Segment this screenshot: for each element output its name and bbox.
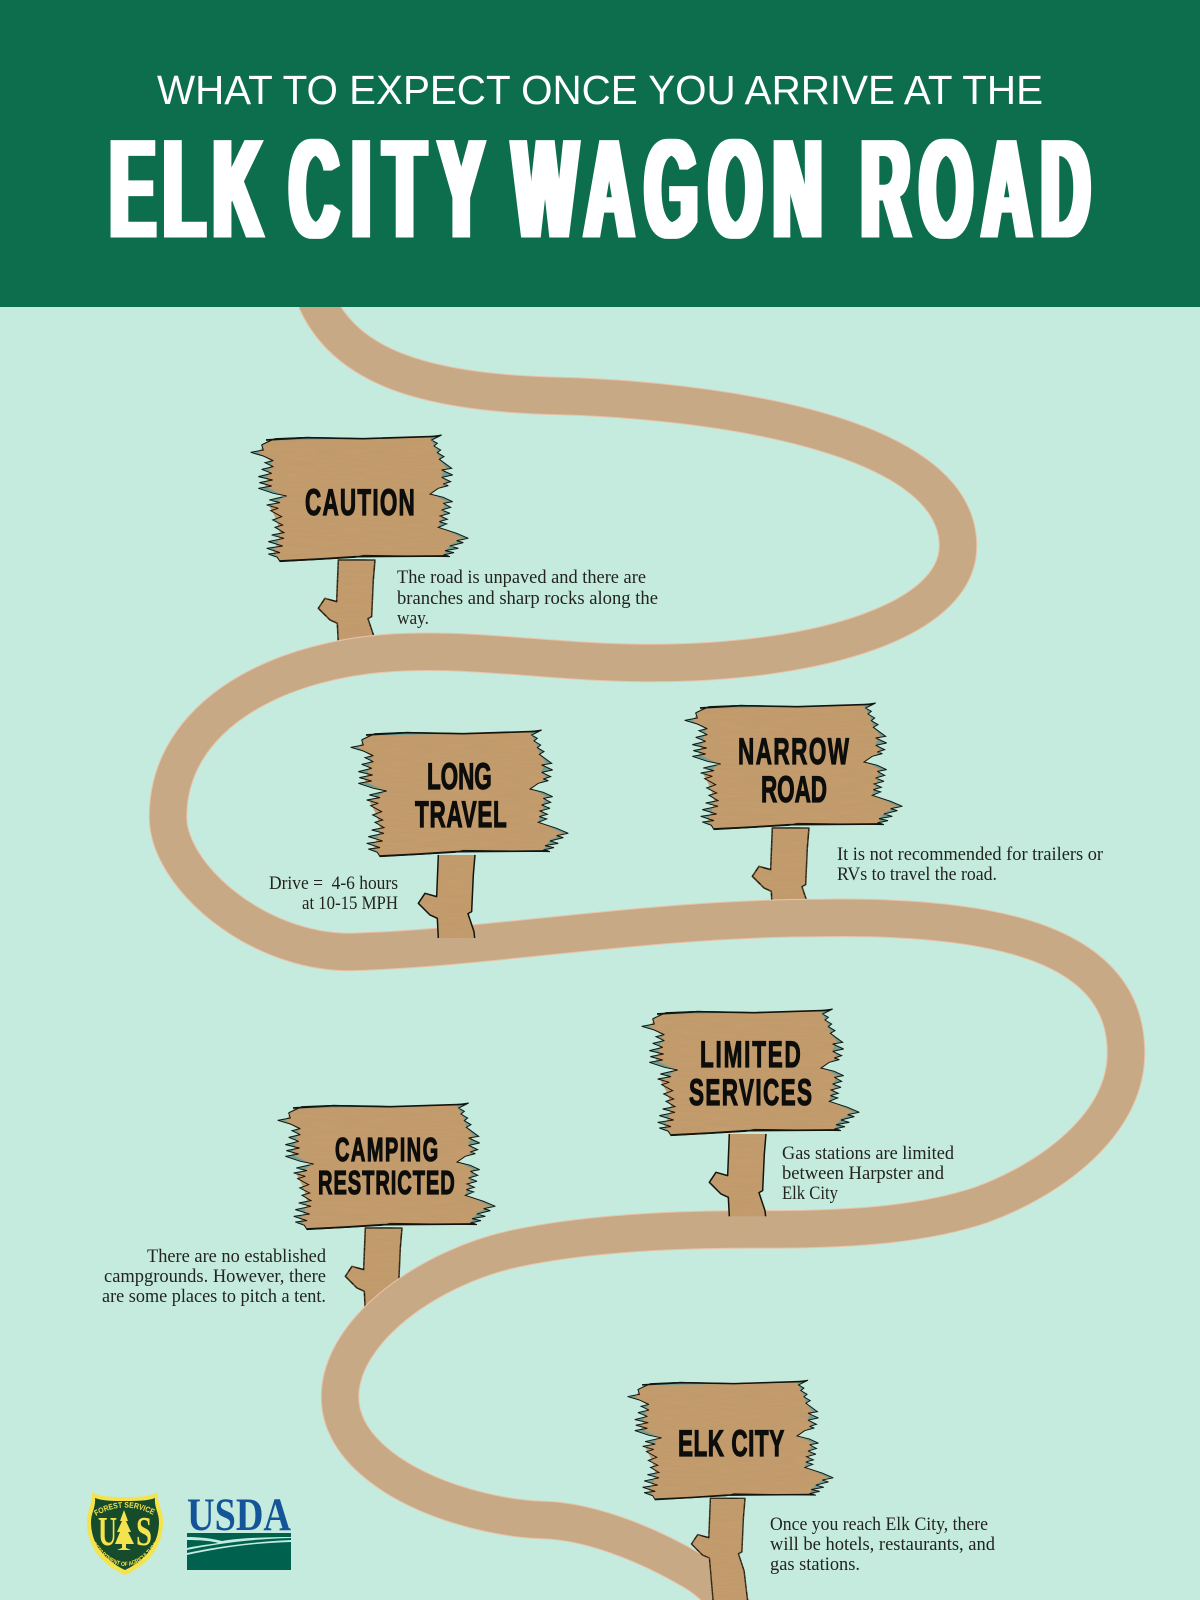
camping restricted post and board [278, 1103, 495, 1312]
header banner [0, 0, 1200, 307]
department of agriculture text: DEPARTMENT OF AGRICULTURE [95, 1542, 155, 1566]
text: camping restricted description: are some places to pitch a tent. [102, 1287, 326, 1307]
text: elk city description: gas stations. [770, 1555, 860, 1575]
long travel post and board [351, 730, 568, 938]
text: limited services description: between Harpster and [782, 1164, 945, 1184]
usda green field [187, 1533, 291, 1541]
sign: limited services [642, 1009, 859, 1216]
limited services label [689, 1033, 812, 1113]
winding road [168, 300, 1126, 1600]
letter S: S [136, 1508, 152, 1554]
camping restricted label: CAMPING [335, 1131, 438, 1168]
main title: ROAD [861, 110, 1090, 268]
limited services label: LIMITED [700, 1033, 801, 1075]
text: elk city description: Once you reach Elk City, there [770, 1515, 988, 1535]
long travel label [415, 755, 507, 835]
sign: elk city [628, 1380, 833, 1600]
sign: narrow road [685, 703, 902, 912]
logo: forest service shield [87, 1492, 163, 1575]
camping restricted label: RESTRICTED [318, 1164, 455, 1201]
limited services post and board [642, 1009, 859, 1216]
sign: long travel [351, 730, 568, 938]
pine tree [115, 1510, 134, 1550]
sign: camping restricted [278, 1103, 495, 1312]
text: elk city description: will be hotels, restaurants, and [770, 1535, 996, 1555]
long travel label: LONG [427, 755, 492, 797]
elk city post and board [628, 1380, 833, 1600]
text: caution description: branches and sharp rocks along the [397, 589, 658, 609]
narrow road label [738, 730, 850, 810]
main title: CITY [290, 110, 484, 268]
caution post and board [251, 435, 468, 644]
forest service text: FOREST SERVICE [94, 1502, 156, 1516]
usda wordmark: USDA [187, 1489, 291, 1541]
narrow road label: NARROW [738, 730, 850, 772]
main title: WAGON [513, 110, 822, 268]
text: camping restricted description: campgrounds. However, there [104, 1267, 326, 1287]
text: long travel description: Drive = 4-6 hours [269, 874, 398, 894]
main title: ELK [110, 110, 262, 268]
subtitle: WHAT TO EXPECT ONCE YOU ARRIVE AT THE [157, 67, 1043, 113]
narrow road label: ROAD [761, 768, 827, 810]
long travel label: TRAVEL [415, 793, 507, 835]
text: caution description: way. [397, 609, 429, 629]
text: caution description: The road is unpaved and there are [397, 568, 646, 588]
limited services label: SERVICES [689, 1071, 812, 1113]
text: narrow road description: RVs to travel the road. [837, 865, 997, 885]
text: limited services description: Gas stations are limited [782, 1144, 955, 1164]
camping restricted label [318, 1131, 455, 1201]
letter U: U [98, 1508, 117, 1554]
sign: caution [251, 435, 468, 644]
logo: usda [187, 1489, 291, 1570]
main title [110, 110, 1090, 268]
narrow road post and board [685, 703, 902, 912]
text: camping restricted description: There are no established [147, 1247, 327, 1267]
elk city label: ELK CITY [678, 1422, 784, 1464]
caution label: CAUTION [305, 481, 415, 523]
text: narrow road description: It is not recommended for trailers or [837, 845, 1103, 865]
text: limited services description: Elk City [782, 1184, 839, 1204]
text: long travel description: at 10-15 MPH [302, 894, 398, 914]
